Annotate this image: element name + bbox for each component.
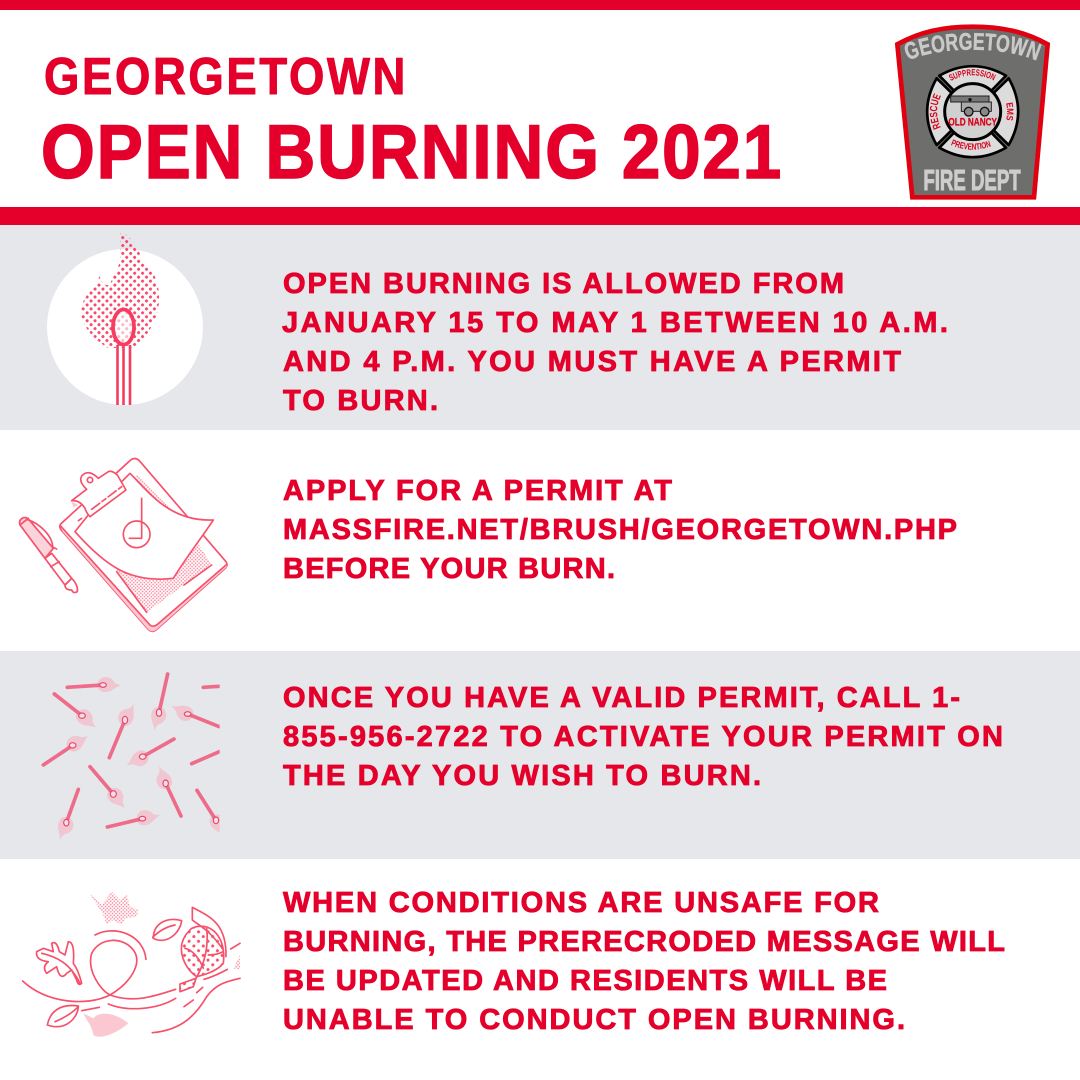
- outlined oak leaf: [36, 942, 82, 984]
- small leaf top: [153, 920, 182, 940]
- panel 1 text: AND 4 P.M. YOU MUST HAVE A PERMIT: [283, 346, 901, 378]
- maltese cross emblem: RESCUE: [930, 93, 941, 130]
- panel 4 text: [283, 887, 1005, 1036]
- panel 3 background: [0, 651, 1080, 859]
- icon: wind and leaves: [23, 892, 240, 1037]
- icon: lit match: [47, 230, 203, 405]
- panel 4 text: BE UPDATED AND RESIDENTS WILL BE: [283, 965, 887, 997]
- panel 1 text: TO BURN.: [283, 385, 438, 417]
- panel 4 text: UNABLE TO CONDUCT OPEN BURNING.: [283, 1004, 905, 1036]
- panel 1 background: [0, 225, 1080, 430]
- maltese cross emblem: [926, 64, 1020, 158]
- panel 3 text: [283, 682, 1003, 792]
- panel 2 text: APPLY FOR A PERMIT AT: [283, 475, 672, 507]
- badge text: Fire Dept: FIRE DEPT: [923, 165, 1021, 197]
- maltese cross emblem: EMS: [1006, 102, 1014, 120]
- icon: scattered matches: [43, 674, 232, 843]
- panel 3 text: 855-956-2722 TO ACTIVATE YOUR PERMIT ON: [283, 721, 1003, 753]
- panel 1 text: JANUARY 15 TO MAY 1 BETWEEN 10 A.M.: [282, 307, 948, 339]
- panel 2 text: [283, 475, 957, 585]
- panel 3 text: ONCE YOU HAVE A VALID PERMIT, CALL 1-: [283, 682, 960, 714]
- large dotted leaf: [181, 926, 224, 977]
- panel 4 text: WHEN CONDITIONS ARE UNSAFE FOR: [283, 887, 879, 919]
- clip: [72, 471, 126, 517]
- header divider bar: [0, 207, 1080, 225]
- panel 4 text: BURNING, THE PRERECRODED MESSAGE WILL: [283, 926, 1005, 958]
- icon: clipboard and pen: [20, 458, 227, 631]
- clipboard: [60, 458, 227, 631]
- paper sheet: [75, 473, 213, 579]
- clock: [123, 521, 150, 548]
- maltese cross emblem: SUPPRESSION: [948, 69, 996, 80]
- title line: Open Burning 2021: OPEN BURNING 2021: [41, 110, 783, 195]
- badge text: Georgetown: GEORGETOWN: [904, 32, 1042, 60]
- maltese cross emblem: OLD NANCY: [948, 116, 997, 128]
- pen: [20, 517, 53, 558]
- wind swirl: [23, 931, 240, 1033]
- header: title block: [41, 48, 783, 195]
- panel 1 text: [282, 268, 948, 417]
- pink leaf: [83, 1013, 128, 1037]
- fire department badge: [894, 24, 1050, 200]
- dotted oak leaf: [90, 892, 138, 925]
- maltese cross emblem: PREVENTION: [951, 139, 991, 150]
- panel 3 text: THE DAY YOU WISH TO BURN.: [283, 760, 761, 792]
- lower leaf: [47, 1006, 78, 1027]
- top red bar: [0, 0, 1080, 10]
- title line: Georgetown: GEORGETOWN: [44, 48, 408, 106]
- fire engine: [951, 96, 991, 116]
- panel 2 text: BEFORE YOUR BURN.: [283, 553, 615, 585]
- panel 1 text: OPEN BURNING IS ALLOWED FROM: [283, 268, 844, 300]
- panel 2 text: MASSFIRE.NET/BRUSH/GEORGETOWN.PHP: [283, 514, 957, 546]
- badge shield: [897, 27, 1048, 197]
